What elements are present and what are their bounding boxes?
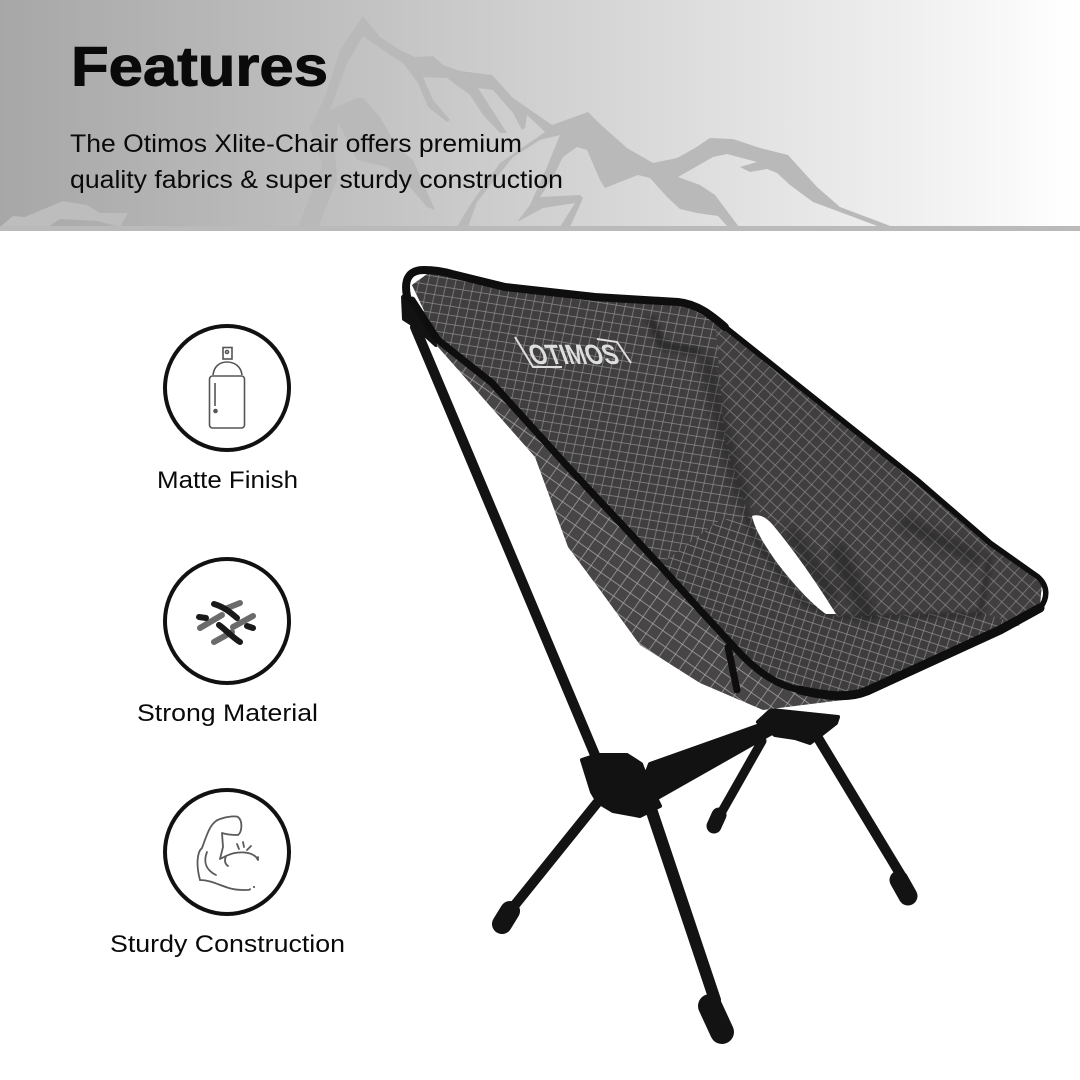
- icon: spray can: [165, 326, 289, 450]
- description: quality fabrics & super sturdy construction: [70, 166, 563, 194]
- edge binding: [406, 270, 1046, 696]
- frame hubs and crossbar: [403, 295, 838, 816]
- label: Strong Material: [137, 700, 318, 727]
- feature: strong material: [137, 559, 318, 727]
- icon: flexed arm: [165, 790, 289, 914]
- icon: woven strands: [165, 559, 289, 683]
- header bottom rule: [0, 226, 1080, 231]
- fabric: underside panel: [418, 308, 843, 710]
- feature: matte finish: [157, 326, 298, 494]
- description: The Otimos Xlite-Chair offers premium: [70, 130, 522, 158]
- panel: header banner: [0, 0, 1080, 231]
- fabric: base silhouette: [412, 272, 1042, 697]
- description: [70, 130, 563, 194]
- label: Matte Finish: [157, 467, 298, 494]
- label: Sturdy Construction: [110, 931, 345, 958]
- title: Features: [71, 34, 328, 98]
- seat cut-out: [752, 515, 836, 614]
- brand logo: OTIMOS: [524, 340, 623, 371]
- fabric: right side panel: [715, 320, 1042, 632]
- product photo: camping chair: [403, 270, 1046, 1032]
- fabric: back panel: [412, 272, 790, 640]
- mountain illustration: [0, 16, 893, 227]
- feature: sturdy construction: [110, 790, 345, 958]
- chair legs and frame: [415, 327, 908, 1032]
- fabric folds: [650, 318, 990, 620]
- fabric: seat panel: [660, 516, 1020, 697]
